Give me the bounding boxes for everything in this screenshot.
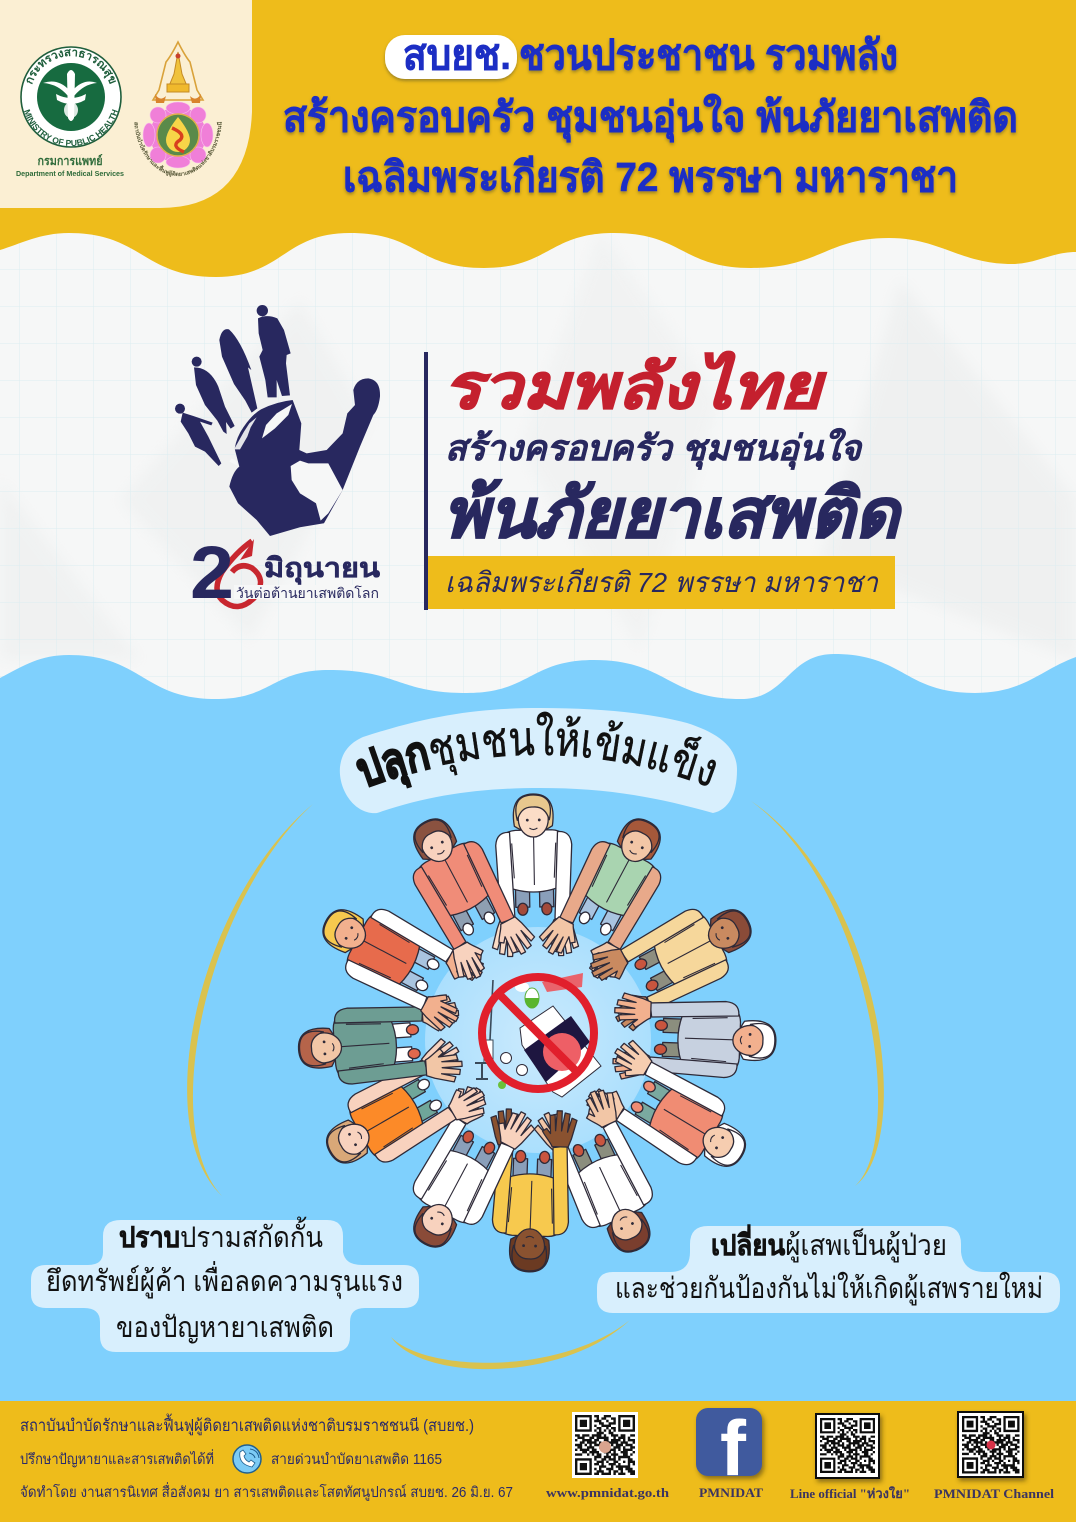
logo: Department of Medical Services: กระทรวงสาธารณสุข [26, 48, 116, 84]
header band with wave [0, 0, 1076, 277]
footer band [0, 1401, 1076, 1522]
person: pink shirt [581, 1036, 764, 1193]
slogan block: เฉลิมพระเกียรติ 72 พรรษา มหาราชา [445, 567, 879, 598]
logo: Department of Medical Services: Department of Medical Services [16, 169, 124, 178]
QR labels: PMNIDAT Channel [934, 1486, 1054, 1501]
logo: 26 June [190, 531, 381, 614]
logo: institute emblem: สถาบันบำบัดรักษาและฟื้นฟูผู้ติดยาเสพติดแห่งชาติบรมราชชนนี [134, 122, 222, 177]
label: date: มิถุนายน [264, 553, 381, 585]
slogan block: สร้างครอบครัว ชุมชนอุ่นใจ [445, 428, 864, 470]
person: white shirt [490, 793, 579, 957]
callout: patient care [597, 1224, 1060, 1313]
heading bubble: wake communities: ปลุกชุมชนให้เข้มแข็ง [356, 712, 716, 788]
icon: phone [233, 1445, 261, 1473]
QR labels [546, 1485, 1054, 1501]
logo: Department of Medical Services: กรมการแพทย์ [38, 154, 102, 168]
slogan block: พ้นภัยยาเสพติด [443, 476, 903, 552]
arc decorations [187, 801, 884, 1369]
finger figures [175, 305, 291, 466]
callout: patient care: เปลี่ยนผู้เสพเป็นผู้ป่วย [711, 1224, 947, 1263]
logo: institute emblem [134, 40, 222, 177]
logo: 26 June: 2 [190, 531, 234, 614]
callout: suppression: ปราบปรามสกัดกั้น [119, 1216, 323, 1254]
QR: YouTube channel [958, 1412, 1023, 1477]
logo: 26 June: วันต่อต้านยาเสพติดโลก [236, 585, 379, 601]
person: white blouse [387, 1081, 539, 1264]
person: grey shirt [612, 993, 777, 1084]
header title: ชวนประชาชน รวมพลัง [519, 32, 898, 78]
header title: สร้างครอบครัว ชุมชนอุ่นใจ พ้นภัยยาเสพติด [283, 93, 1018, 143]
person: white shirt with tie [531, 1085, 677, 1268]
QR labels: PMNIDAT [699, 1485, 763, 1500]
title pill: สบยช. [403, 32, 511, 78]
slogan block: รวมพลังไทย [443, 351, 826, 422]
QR labels: Line official "ห่วงใย" [790, 1485, 910, 1501]
callout: suppression: ของปัญหายาเสพติด [116, 1312, 334, 1344]
logo: Department of Medical Services [16, 46, 124, 178]
contact text: สายด่วนบำบัดยาเสพติด 1165 [271, 1452, 442, 1468]
disc behind drug icon [425, 927, 651, 1153]
icon: hand with people and world map [175, 305, 380, 536]
QR labels: www.pmnidat.go.th [546, 1485, 670, 1500]
slogan block [424, 351, 903, 610]
header title: เฉลิมพระเกียรติ 72 พรรษา มหาราชา [343, 154, 958, 200]
contact text [20, 1413, 513, 1501]
paper background [0, 0, 1076, 720]
logo panel [0, 0, 252, 208]
callout: suppression: ยึดทรัพย์ผู้ค้า เพื่อลดความรุนแรง [46, 1261, 403, 1299]
contact text: ปรึกษาปัญหายาและสารเสพติดได้ที่ [20, 1449, 214, 1468]
person: green shirt [535, 802, 687, 985]
icon: no drugs [475, 973, 601, 1097]
person: orange shirt [309, 1034, 492, 1190]
contact text: จัดทำโดย งานสารนิเทศ สื่อสังคม ยา สารเสพติดและโสตทัศนูปกรณ์ สบยช. 26 มิ.ย. 67 [20, 1482, 513, 1501]
continents [291, 461, 343, 521]
icon: Facebook [696, 1404, 762, 1492]
person: red shirt [306, 883, 489, 1035]
person: beige shirt [585, 883, 768, 1035]
callout: suppression [31, 1216, 419, 1352]
circle of people [296, 793, 777, 1273]
blue section with wave [0, 654, 1076, 1410]
person: teal jacket [296, 995, 463, 1093]
person: salmon sweater [387, 802, 539, 985]
QR: website [572, 1412, 638, 1478]
palm [229, 378, 380, 536]
logo: Department of Medical Services: MINISTRY OF PUBLIC HEALTH [24, 109, 118, 146]
icon: Facebook: f [720, 1404, 747, 1492]
contact text: สถาบันบำบัดรักษาและฟื้นฟูผู้ติดยาเสพติดแห่งชาติบรมราชชนนี (สบยช.) [20, 1413, 474, 1436]
QR: Line official [816, 1414, 879, 1478]
header title [283, 32, 1018, 200]
person: yellow shirt [486, 1108, 577, 1273]
